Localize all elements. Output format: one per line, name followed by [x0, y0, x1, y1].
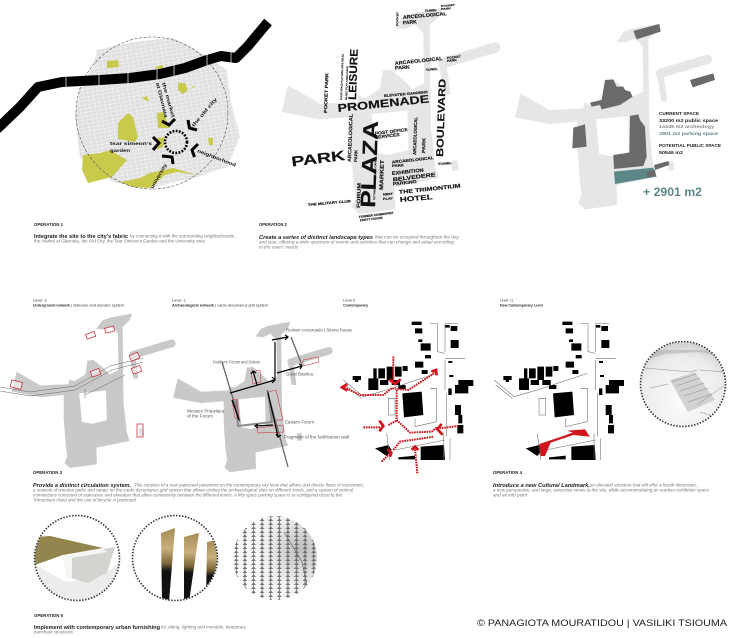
- text block: operation 4: an elevated structure that will offer a fourth dimension,: [590, 482, 697, 488]
- text block: operation 2: to the users' needs: [259, 244, 299, 250]
- landscape type words: ELEVATED GARDENS: [384, 90, 429, 98]
- landscape type words: POCKET: [447, 55, 461, 60]
- text block: operation 5: for sitting, lighting and movable, temporary: [161, 624, 247, 630]
- landscape type words: PARTY HOUSE: [360, 216, 383, 222]
- dotted circle: wooden bench furnishing: [34, 516, 122, 600]
- text block: operation 2: that can be occupied throughout the day: [375, 234, 460, 240]
- level heading: | staircase and elevator system: [71, 304, 124, 308]
- landscape type words: PARK: [392, 163, 405, 168]
- red movement flows: [342, 357, 458, 473]
- text block: operation 4: and an info point: [493, 492, 528, 498]
- annotation labels: Eastern Forum: [285, 420, 314, 424]
- landscape type words: POCKET PARK: [323, 72, 329, 113]
- landscape type words: ARCAEOLOGICAL: [392, 155, 435, 164]
- underground paths: [0, 358, 143, 398]
- landscape type words: PARK: [447, 58, 458, 63]
- text block: operation 5: merchant structures: [34, 630, 74, 634]
- landscape type words: TUNEL: [425, 8, 437, 13]
- landscape type words: POCKET: [395, 11, 400, 26]
- landscape type words: HOTEL: [400, 194, 434, 204]
- annotation labels: Great Basilica: [286, 372, 314, 376]
- space statistics: CURRENT SPACE: [659, 111, 699, 116]
- level heading: Underground network: [33, 304, 70, 308]
- dotted circle: wooden lighting poles: [132, 516, 218, 602]
- dashed site radius circle: [76, 37, 228, 189]
- green parks: [82, 60, 213, 188]
- building footprints: [494, 322, 624, 460]
- landscape type words: LEISURE: [347, 49, 361, 100]
- cardo and decumanus axis lines: [222, 337, 302, 467]
- landscape type words: POCKET: [441, 3, 456, 8]
- red elevated cultural landmark: [539, 429, 590, 456]
- level heading: Level +1: [500, 298, 513, 302]
- level heading: Level -1: [172, 298, 186, 302]
- panel: level -1 archaeological network: [172, 298, 353, 472]
- text block: operation 2: OPERATION 2: [259, 222, 288, 227]
- city fabric blocks: [75, 38, 240, 188]
- text block: operation 1: [34, 222, 235, 244]
- text block: operation 3: Provide a distinct circulation system.: [33, 483, 131, 489]
- text block: operation 5: [34, 613, 247, 634]
- space statistics: 14445 m2 archeology: [659, 124, 715, 129]
- text block: operation 1: the market at Glavnata, the Old City, the Tsar Simeon's Garden and the University area: [34, 238, 206, 244]
- text block: operation 4: OPERATION 4: [493, 470, 523, 475]
- parking space in teal: [614, 168, 657, 184]
- landscape type words: PROMENADE: [337, 93, 430, 115]
- panel: operation 1 city fabric map: [0, 22, 268, 190]
- level heading: Level -2: [33, 298, 47, 302]
- landscape type words: POST OFFICE: [375, 127, 408, 136]
- panel: level +1 new contemporary level: [494, 298, 624, 460]
- landscape type words: PLAY: [383, 196, 393, 201]
- annotation labels: Western Propylaea: [187, 408, 225, 414]
- level heading: [500, 298, 543, 308]
- level heading: [172, 298, 268, 308]
- dotted circle: render of the landmark: [640, 342, 726, 426]
- text block: operation 3: connections consisted of staircases and elevators that allow connectivity between the different levels. A fifty spots parking space is re-configured close to the: [33, 492, 343, 498]
- text block: operation 5: Implement with contemporary urban furnishing: [34, 625, 161, 631]
- landscape type words: PARK: [290, 147, 346, 169]
- site plan base: [173, 322, 329, 472]
- landscape type words: TUNEL: [438, 161, 452, 166]
- dotted central site circle: [165, 131, 187, 153]
- added area figure: + 2901 m2: [643, 187, 702, 199]
- annotation labels: [187, 328, 353, 440]
- space statistics: POTENTIAL PUBLIC SPACE: [659, 143, 721, 148]
- circle: movable merchant structures plan: [233, 516, 317, 600]
- arrow chevrons pointing to the site: [153, 119, 198, 164]
- text block: operation 3: Trimontium Hotel and the use of bicycle is promoted: [33, 498, 137, 502]
- landscape type words: ARCAEOLOGICAL: [412, 117, 418, 155]
- landscape type words: BELVEDERE: [393, 172, 436, 183]
- text block: operation 4: Introduce a new Cultural Landmark,: [493, 483, 590, 489]
- level heading: | cardo decumanus grid system: [215, 304, 268, 308]
- panel: level -2 underground network: [0, 298, 172, 468]
- landscape type words: MUSIC PLAY AREA CAFE: [345, 65, 349, 100]
- space statistics: [659, 111, 721, 155]
- text block: operation 4: a new perspective, and large, extensive views to the site, while accommodating an outdoor exhibition space: [493, 488, 710, 492]
- text block: operation 1: by connecting it with the surrounding neighborhoods,: [130, 234, 235, 238]
- annotation labels: Northern Forum and Odeon: [213, 360, 260, 364]
- landscape type words: SITTING EVENT SPACE CAFE: [373, 159, 377, 200]
- text block: operation 3: This consists of a new patterned pavement on the contemporary city level that allows and directs flows of movement,: [134, 482, 364, 488]
- landscape type words: BOULEVARD: [435, 79, 449, 157]
- level heading: [33, 298, 124, 308]
- level heading: Level 0: [343, 298, 355, 302]
- map labels: neighborhood: [196, 148, 237, 169]
- level heading: Contemporary: [343, 304, 368, 308]
- river bridges: [66, 52, 231, 88]
- landscape type words: FORMER COMMUNIST: [359, 211, 394, 219]
- landscape type words: ARCAEOLOGICAL: [347, 114, 355, 162]
- site plan base: [12, 313, 172, 468]
- landscape type words: PARK: [353, 150, 358, 162]
- space statistics: 2901 m2 parking space: [659, 131, 719, 136]
- level heading: Archaeological network: [172, 304, 214, 308]
- landscape type words: PARK: [441, 6, 451, 11]
- landscape type words: PARK: [403, 19, 418, 26]
- map labels: garden: [110, 148, 130, 154]
- panel: operation 2 landscape types word map: [282, 3, 495, 222]
- map labels: the old city: [191, 96, 219, 128]
- map labels: university: [150, 162, 169, 190]
- landscape type words: PARK: [421, 137, 427, 153]
- landscape type words: FORUM: [356, 183, 363, 208]
- existing buildings: [572, 24, 715, 184]
- space statistics: 33200 m2 public space: [659, 118, 719, 123]
- level heading: New Contemporary Level: [500, 304, 543, 308]
- landscape type words: TUNEL: [426, 67, 438, 72]
- annotation labels: of the Forum: [187, 414, 213, 418]
- text block: operation 3: a network of wooden paths and ramps on the cardo decumanus grid system that allows visiting the archaeological sites on different levels, and a system of vertical: [33, 488, 354, 492]
- level heading: [343, 298, 368, 308]
- annotation labels: Roman crossroads | Sirene house: [286, 328, 353, 332]
- landscape type words: EVENT SPACE PLAY AREA CAFE RELAX: [340, 54, 345, 100]
- building footprints: [343, 322, 473, 460]
- annotation labels: Fragment of the fortification wall: [284, 434, 349, 440]
- landscape type words: NEST: [383, 192, 393, 196]
- map labels: tsar simeon's: [110, 141, 152, 147]
- text block: operation 1: Integrate the site to the city's fabric: [34, 234, 128, 240]
- landscape type words: ARCAEOLOGICAL: [395, 56, 443, 67]
- landscape type words: [290, 3, 461, 222]
- landscape type words: PARK: [395, 65, 411, 71]
- landscape type words: THE TRIMONTIUM: [399, 183, 461, 196]
- text block: operation 3: OPERATION 3: [33, 470, 63, 475]
- text block: operation 2: [259, 222, 460, 250]
- site plan base: [515, 23, 707, 209]
- copyright credit: © PANAGIOTA MOURATIDOU | VASILIKI TSIOUMA: [477, 618, 728, 629]
- text block: operation 4: [493, 470, 710, 498]
- space statistics: 50546 m2: [659, 150, 684, 155]
- landscape type words: EXHIBITION: [392, 168, 424, 177]
- text block: operation 2: Create a series of distinct landscape types: [259, 235, 373, 241]
- text block: operation 3: [33, 470, 364, 502]
- walkway ring around the central void: [236, 392, 272, 426]
- text block: operation 2: and year, offering a wide spectrum of events and activities that can change and adapt according: [259, 240, 455, 244]
- landscape type words: THE MILITARY CLUB: [308, 199, 351, 207]
- map labels: at Glavnata: [154, 82, 169, 119]
- text block: operation 5: OPERATION 5: [34, 613, 64, 618]
- circulation arrows: [230, 335, 302, 437]
- panel: level 0 contemporary: [342, 298, 473, 473]
- map labels: [110, 82, 237, 190]
- panel: operation 2b space calculation plan: [515, 23, 721, 209]
- river: [0, 22, 268, 129]
- landscape type words: PARKING: [393, 179, 418, 186]
- map labels: the market: [160, 82, 176, 119]
- site plan base: [282, 8, 495, 214]
- text block: operation 1: OPERATION 1: [34, 222, 64, 227]
- landscape type words: ARCEOLOGICAL: [403, 11, 447, 21]
- landscape type words: SERVICES: [375, 132, 400, 140]
- landscape type words: PLAZA: [357, 120, 383, 208]
- landscape type words: MARKET: [379, 159, 386, 190]
- archaeological site outlines: [232, 357, 319, 433]
- red stair and elevator markers: [10, 326, 143, 437]
